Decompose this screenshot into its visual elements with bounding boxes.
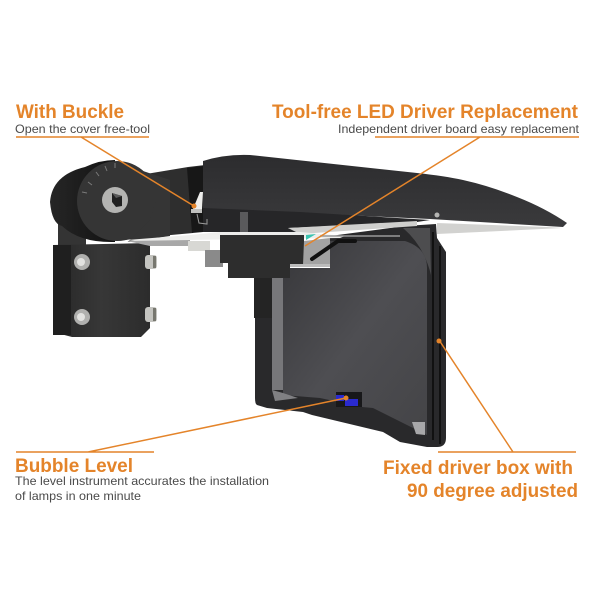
marker: bubble level — [344, 396, 348, 400]
LED lens strip — [288, 221, 563, 234]
mounting arm — [125, 165, 205, 240]
leader line: bubble level — [16, 398, 346, 452]
callout: with buckle — [15, 102, 196, 208]
driver board and wire — [290, 234, 400, 267]
leader line: tool-free driver replacement — [305, 137, 579, 246]
subtext: tool-free driver replacement: Independent driver board easy replacement — [338, 122, 580, 136]
heading: fixed driver box: 90 degree adjusted — [407, 481, 578, 502]
leader line: with buckle — [16, 137, 194, 206]
buckle clip — [191, 192, 207, 224]
marker: buckle — [192, 204, 196, 208]
pivot cylinder with angle dial — [50, 160, 170, 242]
callout: bubble level — [15, 396, 348, 503]
illustration: LED shoebox light with open driver box — [50, 155, 567, 447]
heading: fixed driver box: Fixed driver box with — [383, 458, 573, 479]
leader line: fixed driver box — [438, 340, 576, 452]
bubble level — [336, 392, 362, 407]
heading: with buckle: With Buckle — [16, 102, 124, 123]
description: bubble level: of lamps in one minute — [15, 489, 141, 503]
cover plate and connector — [127, 232, 345, 267]
bracket bolts — [74, 254, 157, 325]
heading: bubble level: Bubble Level — [15, 456, 133, 477]
fixture housing — [203, 155, 567, 232]
subtext: with buckle: Open the cover free-tool — [15, 122, 150, 136]
heading: tool-free driver replacement: Tool-free LED Driver Replacement — [272, 102, 579, 123]
driver box panel — [255, 224, 446, 447]
marker: driver box — [436, 338, 442, 344]
callout: fixed driver box — [383, 338, 578, 502]
mounting bracket — [53, 222, 157, 337]
description: bubble level: The level instrument accurates the installation — [15, 474, 269, 488]
driver block — [220, 235, 304, 318]
callout: tool-free driver replacement — [272, 102, 580, 246]
